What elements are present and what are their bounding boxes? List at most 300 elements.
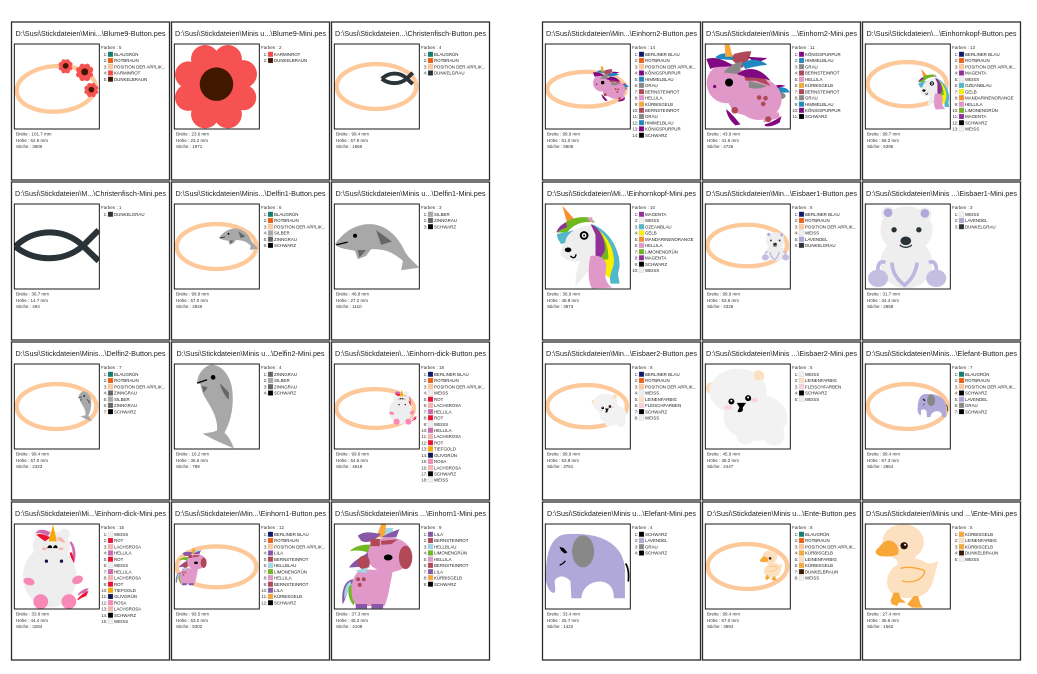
- colour legend: BERLINER BLAU: [274, 532, 309, 537]
- colour legend: GELB: [965, 89, 977, 94]
- colour legend: 1:: [264, 372, 267, 377]
- colour legend: ZINNGRAU: [114, 391, 137, 396]
- title: D:\Susi\Stickdateien\...\Einhornkopf-Button.pes: [866, 29, 1017, 38]
- stats: Höhe : 62.9 mm: [16, 138, 48, 143]
- colour legend: 4:: [264, 391, 267, 396]
- colour legend: MAGENTA: [645, 212, 666, 217]
- stats: [707, 132, 740, 149]
- colour legend: 9:: [424, 582, 427, 587]
- stats: Breite : 36.8 mm: [547, 292, 580, 297]
- colour legend: BERLINER BLAU: [965, 52, 1000, 57]
- colour legend: 11:: [953, 114, 958, 119]
- colour legend: HELLILA: [434, 428, 452, 433]
- embroidery preview: [14, 228, 99, 264]
- colour legend: BERNSTEINROT: [645, 89, 680, 94]
- stats: Stiche : 5395: [867, 144, 894, 149]
- colour legend: 1:: [635, 52, 638, 57]
- stats: Breite : 43.8 mm: [707, 132, 740, 137]
- colour legend: [952, 365, 1016, 414]
- stats: Breite : 46.8 mm: [336, 292, 369, 297]
- colour legend: KÖNIGSPURPUR: [645, 127, 681, 132]
- colour legend: Farben : 15: [101, 525, 125, 530]
- stats: Höhe : 27.2 mm: [336, 298, 368, 303]
- colour legend: Farben : 8: [632, 365, 653, 370]
- stats: Höhe : 35.6 mm: [176, 458, 208, 463]
- colour legend: 5:: [264, 557, 267, 562]
- card: Delfin1-Button: [172, 182, 330, 340]
- stats: Höhe : 48.8 mm: [547, 298, 579, 303]
- colour legend: 7:: [424, 409, 427, 414]
- stats: Höhe : 57.9 mm: [336, 138, 368, 143]
- colour legend: LILA: [274, 588, 283, 593]
- colour legend: POSITION DER APPLIK...: [274, 544, 325, 549]
- stats: Stiche : 493: [16, 304, 40, 309]
- colour legend: 4:: [795, 551, 798, 556]
- colour legend: 1:: [264, 532, 267, 537]
- colour legend: [101, 365, 165, 414]
- colour legend: SCHWARZ: [114, 613, 136, 618]
- embroidery preview: [334, 62, 418, 112]
- embroidery preview: [175, 45, 257, 128]
- colour legend: ROTBRAUN: [805, 538, 830, 543]
- colour legend: BERNSTEINROT: [274, 557, 309, 562]
- stats: Stiche : 3606: [16, 144, 43, 149]
- embroidery preview: [23, 524, 88, 609]
- stats: Breite : 99.8 mm: [176, 292, 209, 297]
- colour legend: LILA: [434, 569, 443, 574]
- colour legend: LACHSROSA: [114, 607, 141, 612]
- colour legend: 4:: [424, 551, 427, 556]
- colour legend: 10:: [261, 588, 267, 593]
- colour legend: 3:: [795, 224, 798, 229]
- colour legend: LACHSROSA: [114, 544, 141, 549]
- stats: [547, 452, 580, 469]
- title: D:\Susi\Stickdateien\M...\Christenfisch-Mini.pes: [15, 189, 166, 198]
- colour legend: SCHWARZ: [965, 120, 987, 125]
- stats: Stiche : 4328: [707, 304, 734, 309]
- title: D:\Susi\Stickdateien\Minis...\Delfin2-Button.pes: [16, 349, 166, 358]
- colour legend: 3:: [424, 384, 427, 389]
- colour legend: WEISS: [645, 218, 659, 223]
- colour legend: SILBER: [434, 212, 450, 217]
- colour legend: SCHWARZ: [645, 262, 667, 267]
- colour legend: 2:: [104, 538, 107, 543]
- colour legend: 7:: [795, 569, 798, 574]
- stats: Breite : 16.2 mm: [176, 452, 209, 457]
- colour legend: HELLBLAU: [434, 544, 456, 549]
- stats: Stiche : 2447: [707, 464, 734, 469]
- colour legend: 12:: [261, 600, 267, 605]
- colour legend: ROTBRAUN: [965, 378, 990, 383]
- stats: [176, 612, 209, 629]
- colour legend: Farben : 12: [261, 525, 285, 530]
- colour legend: Farben : 6: [261, 205, 282, 210]
- stats: Breite : 99.6 mm: [336, 452, 369, 457]
- colour legend: 12:: [952, 120, 958, 125]
- colour legend: BERNSTEINROT: [274, 582, 309, 587]
- embroidery preview: [868, 206, 946, 288]
- colour legend: 11:: [422, 434, 427, 439]
- colour legend: [261, 205, 325, 248]
- stats: Stiche : 3751: [547, 464, 574, 469]
- colour legend: BERLINER BLAU: [645, 52, 680, 57]
- card: Einhorn-dick-Button: [332, 342, 490, 500]
- stats: Höhe : 57.0 mm: [707, 618, 739, 623]
- colour legend: 11:: [793, 114, 798, 119]
- colour legend: KÜRBISGELB: [965, 544, 993, 549]
- colour legend: KÜRBISGELB: [805, 551, 833, 556]
- colour legend: 2:: [795, 538, 798, 543]
- colour legend: 2:: [424, 218, 427, 223]
- colour legend: KÖNIGSPURPUR: [805, 52, 841, 57]
- colour legend: [421, 365, 485, 483]
- colour legend: WEISS: [434, 478, 448, 483]
- card: Ente-Button: [702, 502, 860, 660]
- colour legend: DUNKELBRAUN: [805, 569, 838, 574]
- colour legend: 7:: [955, 409, 958, 414]
- colour legend: HIMMELBLAU: [805, 102, 834, 107]
- colour legend: BERNSTEINROT: [805, 71, 840, 76]
- colour legend: 16:: [421, 465, 427, 470]
- title: D:\Susi\Stickdateien\Min...\Einhorn1-Button.pes: [175, 509, 326, 518]
- colour legend: 4:: [955, 71, 958, 76]
- colour legend: [421, 525, 469, 587]
- colour legend: 4:: [424, 71, 427, 76]
- colour legend: MANDARINENORANGE: [645, 237, 694, 242]
- colour legend: 6:: [424, 563, 427, 568]
- card: Elefant-Button: [862, 342, 1020, 500]
- stats: Stiche : 2846: [176, 304, 203, 309]
- colour legend: 4:: [104, 71, 107, 76]
- colour legend: Farben : 5: [952, 525, 973, 530]
- colour legend: KARMINROT: [274, 52, 301, 57]
- colour legend: LACHSROSA: [434, 465, 461, 470]
- colour legend: OZEANBLAU: [645, 224, 672, 229]
- colour legend: 5:: [635, 397, 638, 402]
- colour legend: WEISS: [805, 372, 819, 377]
- colour legend: BLAUGRÜN: [274, 212, 298, 217]
- stats: Höhe : 44.4 mm: [16, 618, 48, 623]
- colour legend: LAVENDEL: [965, 218, 988, 223]
- card: Delfin2-Mini: [172, 342, 330, 500]
- colour legend: 15:: [101, 619, 107, 624]
- stats: Höhe : 57.0 mm: [16, 458, 48, 463]
- colour legend: 7:: [424, 569, 427, 574]
- title: D:\Susi\Stickdateien\Minis...\Delfin1-Button.pes: [176, 189, 326, 198]
- colour legend: [101, 45, 165, 82]
- colour legend: SCHWARZ: [805, 391, 827, 396]
- colour legend: 1:: [635, 212, 638, 217]
- colour legend: POSITION DER APPLIK...: [434, 64, 485, 69]
- colour legend: SCHWARZ: [805, 114, 827, 119]
- colour legend: MAGENTA: [965, 114, 986, 119]
- colour legend: 3:: [264, 384, 267, 389]
- colour legend: 2:: [795, 58, 798, 63]
- embroidery preview: [342, 524, 412, 608]
- stats: Breite : 99.4 mm: [16, 452, 49, 457]
- colour legend: ZINNGRAU: [274, 372, 297, 377]
- embroidery preview: [334, 386, 417, 430]
- colour legend: Farben : 8: [792, 525, 813, 530]
- stats: [547, 132, 580, 149]
- card: Eisbaer2-Button: [542, 342, 700, 500]
- stats: Höhe : 51.0 mm: [547, 138, 579, 143]
- stats: Stiche : 1110: [336, 304, 362, 309]
- colour legend: 14:: [101, 613, 107, 618]
- colour legend: LEINENFARBIG: [965, 538, 998, 543]
- colour legend: LACHSROSA: [434, 403, 461, 408]
- stats: Höhe : 57.3 mm: [867, 458, 899, 463]
- colour legend: HELLILA: [114, 569, 132, 574]
- colour legend: 6:: [955, 403, 958, 408]
- colour legend: Farben : 11: [792, 45, 815, 50]
- colour legend: 2:: [955, 218, 958, 223]
- colour legend: SCHWARZ: [965, 409, 987, 414]
- colour legend: WEISS: [114, 532, 128, 537]
- embroidery preview: [14, 382, 98, 432]
- stats: Stiche : 3284: [16, 624, 43, 629]
- embroidery preview: [866, 382, 950, 432]
- stats: Höhe : 38.2 mm: [707, 458, 739, 463]
- colour legend: LIMONENGRÜN: [645, 249, 678, 254]
- colour legend: 3:: [795, 384, 798, 389]
- colour legend: HELLBLAU: [274, 563, 296, 568]
- stats: [16, 292, 49, 309]
- colour legend: 12:: [421, 440, 427, 445]
- colour legend: 4:: [635, 71, 638, 76]
- colour legend: 3:: [955, 64, 958, 69]
- colour legend: WEISS: [434, 422, 448, 427]
- stats: Stiche : 3873: [547, 304, 574, 309]
- colour legend: 6:: [424, 403, 427, 408]
- stats: Höhe : 14.7 mm: [16, 298, 48, 303]
- colour legend: WEISS: [645, 391, 659, 396]
- colour legend: POSITION DER APPLIK...: [805, 544, 856, 549]
- colour legend: GRAU: [805, 96, 818, 101]
- colour legend: 2:: [795, 218, 798, 223]
- colour legend: SILBER: [274, 378, 290, 383]
- card: Delfin2-Button: [12, 342, 170, 500]
- colour legend: Farben : 5: [792, 365, 813, 370]
- colour legend: 3:: [104, 384, 107, 389]
- stats: Stiche : 4108: [336, 624, 363, 629]
- colour legend: 8:: [795, 576, 798, 581]
- colour legend: 1:: [635, 532, 638, 537]
- card: Einhornkopf-Mini: [542, 182, 700, 340]
- card: Einhorn1-Mini: [332, 502, 490, 660]
- colour legend: 5:: [424, 557, 427, 562]
- colour legend: 1:: [795, 52, 798, 57]
- colour legend: DUNKELGRAU: [114, 212, 144, 217]
- colour legend: 15:: [421, 459, 427, 464]
- colour legend: DUNKELGRAU: [805, 243, 836, 248]
- colour legend: POSITION DER APPLIK...: [274, 224, 325, 229]
- colour legend: 2:: [424, 538, 427, 543]
- colour legend: 2:: [955, 58, 958, 63]
- card: Einhorn-dick-Mini: [12, 502, 170, 660]
- embroidery preview: [706, 44, 790, 126]
- embroidery preview: [706, 368, 787, 446]
- colour legend: 2:: [264, 538, 267, 543]
- colour legend: 6:: [635, 243, 638, 248]
- colour legend: 5:: [955, 77, 958, 82]
- colour legend: 6:: [104, 563, 107, 568]
- colour legend: 7:: [635, 249, 638, 254]
- stats: Breite : 36.7 mm: [16, 292, 49, 297]
- colour legend: 14:: [632, 133, 638, 138]
- colour legend: [952, 525, 998, 562]
- colour legend: 5:: [635, 77, 638, 82]
- stats: Stiche : 2854: [867, 464, 894, 469]
- colour legend: LEINENFARBIG: [805, 378, 838, 383]
- colour legend: ROT: [114, 538, 124, 543]
- stats: Breite : 99.8 mm: [707, 292, 740, 297]
- colour legend: 2:: [424, 58, 427, 63]
- colour legend: Farben : 1: [101, 205, 122, 210]
- colour legend: Farben : 14: [632, 45, 656, 50]
- colour legend: 3:: [955, 544, 958, 549]
- title: D:\Susi\Stickdateien\Min...\Eisbaer1-Button.pes: [706, 189, 857, 198]
- colour legend: 6:: [264, 243, 267, 248]
- colour legend: 2:: [955, 378, 958, 383]
- colour legend: 10:: [952, 108, 958, 113]
- stats: Stiche : 5302: [176, 624, 203, 629]
- stats: Breite : 101.7 mm: [16, 132, 52, 137]
- stats: Breite : 99.8 mm: [547, 132, 580, 137]
- colour legend: 1:: [424, 372, 427, 377]
- card: Christenfisch-Button: [332, 22, 490, 180]
- stats: Stiche : 2858: [867, 304, 894, 309]
- stats: [336, 452, 369, 469]
- colour legend: KÜRBISGELB: [434, 576, 462, 581]
- colour legend: 8:: [955, 96, 958, 101]
- colour legend: 6:: [795, 243, 798, 248]
- colour legend: 9:: [424, 422, 427, 427]
- stats: [867, 292, 900, 309]
- stats: Höhe : 53.8 mm: [547, 458, 579, 463]
- colour legend: Farben : 13: [952, 45, 976, 50]
- colour legend: LIMONENGRÜN: [274, 569, 307, 574]
- stats: [16, 452, 49, 469]
- stats: Stiche : 1865: [336, 144, 363, 149]
- card: Eisbaer1-Mini: [862, 182, 1020, 340]
- colour legend: [792, 525, 856, 580]
- embroidery preview: [706, 542, 790, 592]
- colour legend: 3:: [635, 384, 638, 389]
- card: Blume9-Mini: [172, 22, 330, 180]
- stats: Höhe : 41.6 mm: [707, 138, 739, 143]
- colour legend: HELLILA: [434, 409, 452, 414]
- colour legend: ZINNGRAU: [274, 384, 297, 389]
- card: Delfin1-Mini: [332, 182, 490, 340]
- colour legend: LAVENDEL: [965, 397, 988, 402]
- colour legend: 5:: [424, 397, 427, 402]
- colour legend: 4:: [795, 391, 798, 396]
- stats: Höhe : 36.6 mm: [867, 618, 899, 623]
- card: Blume9-Button: [12, 22, 170, 180]
- colour legend: DUNKELGRAU: [965, 224, 996, 229]
- colour legend: ROTBRAUN: [805, 218, 830, 223]
- card: Eisbaer2-Mini: [702, 342, 860, 500]
- colour legend: WEISS: [805, 576, 819, 581]
- stats: Stiche : 789: [176, 464, 200, 469]
- colour legend: KÜRBISGELB: [805, 83, 833, 88]
- colour legend: 5:: [795, 397, 798, 402]
- colour legend: MAGENTA: [965, 71, 986, 76]
- colour legend: 1:: [635, 372, 638, 377]
- colour legend: KÜRBISGELB: [274, 594, 302, 599]
- stats: Breite : 99.8 mm: [547, 452, 580, 457]
- colour legend: 2:: [955, 538, 958, 543]
- embroidery preview: [546, 382, 630, 430]
- colour legend: [101, 205, 144, 217]
- colour legend: 10:: [421, 428, 427, 433]
- colour legend: 4:: [635, 551, 638, 556]
- colour legend: HIMMELBLAU: [645, 120, 674, 125]
- colour legend: KARMINROT: [114, 71, 141, 76]
- colour legend: [261, 525, 325, 605]
- colour legend: WEISS: [114, 563, 128, 568]
- embroidery preview: [546, 534, 630, 598]
- colour legend: [421, 45, 485, 76]
- colour legend: [632, 365, 696, 420]
- stats: Breite : 33.8 mm: [16, 612, 49, 617]
- colour legend: Farben : 3: [952, 205, 973, 210]
- colour legend: 1:: [104, 532, 107, 537]
- colour legend: TIEFGOLD: [434, 447, 456, 452]
- colour legend: ROTBRAUN: [114, 378, 139, 383]
- colour legend: 4:: [424, 391, 427, 396]
- embroidery preview: [335, 224, 419, 270]
- colour legend: GRAU: [965, 403, 978, 408]
- stats: [16, 132, 52, 149]
- colour legend: 4:: [795, 231, 798, 236]
- stats: Breite : 31.7 mm: [867, 292, 900, 297]
- colour legend: SCHWARZ: [965, 391, 987, 396]
- colour legend: ROTBRAUN: [645, 378, 670, 383]
- colour legend: POSITION DER APPLIK...: [965, 64, 1016, 69]
- card: Christenfisch-Mini: [12, 182, 170, 340]
- title: D:\Susi\Stickdateien\Minis u...\Delfin1-Mini.pes: [336, 189, 486, 198]
- card: Einhorn2-Mini: [702, 22, 860, 180]
- stats: Höhe : 25.7 mm: [547, 618, 579, 623]
- colour legend: HELLILA: [114, 551, 132, 556]
- colour legend: 3:: [424, 544, 427, 549]
- colour legend: SCHWARZ: [645, 532, 667, 537]
- colour legend: ROTBRAUN: [114, 58, 139, 63]
- colour legend: KÖNIGSPURPUR: [645, 71, 681, 76]
- colour legend: 7:: [955, 89, 958, 94]
- colour legend: 9:: [955, 102, 958, 107]
- stats: Höhe : 54.5 mm: [336, 458, 368, 463]
- colour legend: ROT: [114, 582, 124, 587]
- colour legend: ROT: [434, 440, 444, 445]
- stats: Höhe : 23.2 mm: [176, 138, 208, 143]
- colour legend: WEISS: [805, 397, 819, 402]
- colour legend: 5:: [264, 237, 267, 242]
- colour legend: 8:: [264, 576, 267, 581]
- stats: Stiche : 1422: [547, 624, 574, 629]
- colour legend: 1:: [795, 532, 798, 537]
- colour legend: 1:: [955, 372, 958, 377]
- colour legend: 4:: [104, 391, 107, 396]
- colour legend: 8:: [635, 256, 638, 261]
- title: D:\Susi\Stickdateien\Minis u...\Delfin2-Mini.pes: [176, 349, 325, 358]
- stats: Höhe : 57.0 mm: [176, 298, 208, 303]
- colour legend: LEINENFARBIG: [645, 397, 678, 402]
- stats: Breite : 99.4 mm: [336, 132, 369, 137]
- colour legend: [952, 45, 1016, 132]
